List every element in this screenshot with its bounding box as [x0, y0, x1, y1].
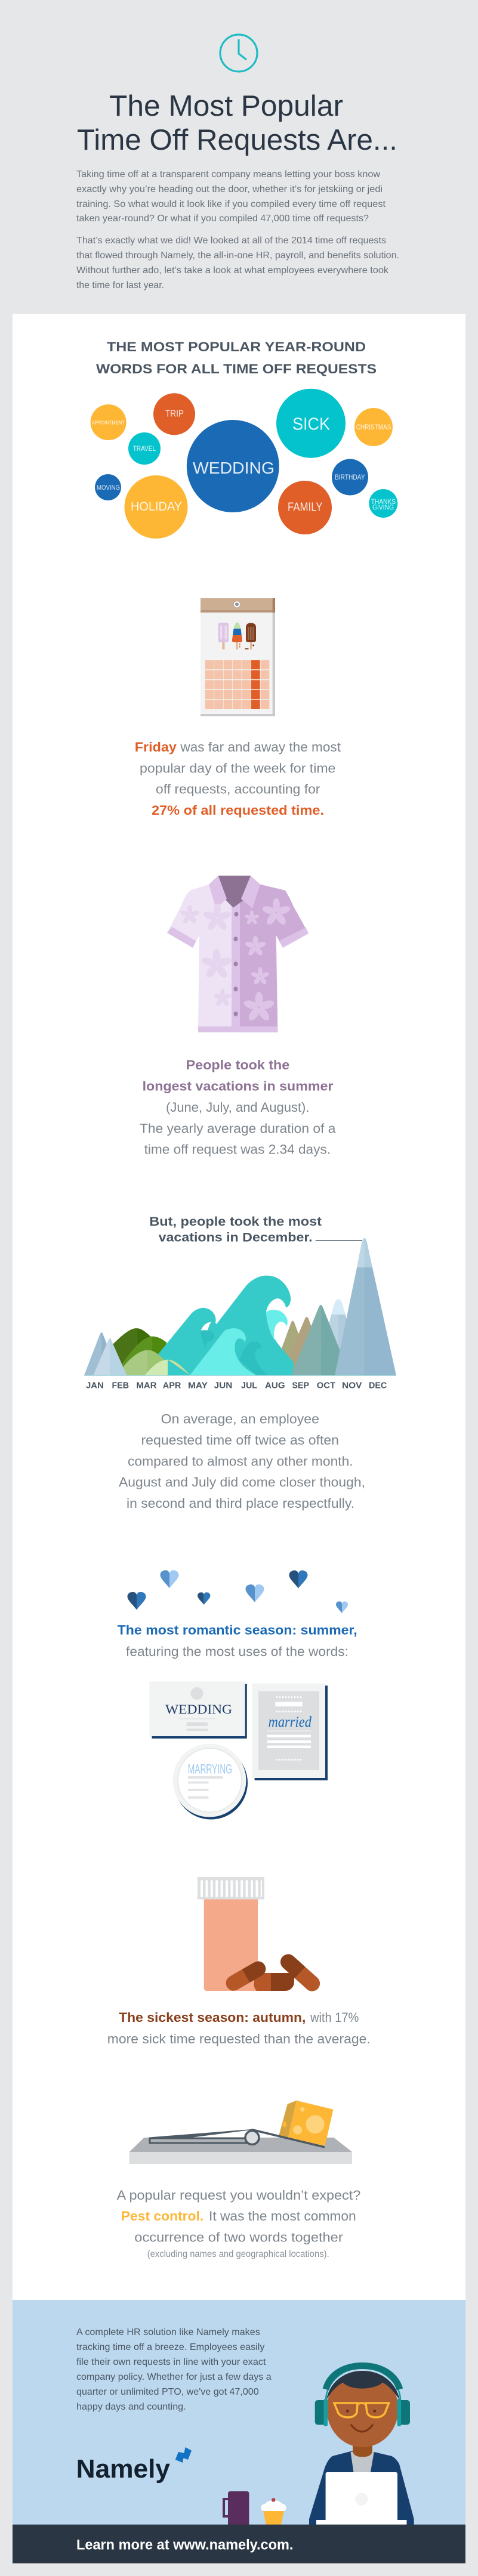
text: pest control: It was the most common: [209, 2209, 356, 2224]
text: Friday: 27% of all requested time.: [152, 803, 324, 818]
text: pest control: A popular request you wouldn’t expect?: [117, 2188, 360, 2203]
footer text: happy days and counting.: [76, 2402, 186, 2412]
chart: word bubbles: WEDDING: [193, 459, 275, 477]
text: longest vacations: (June, July, and August).: [166, 1100, 309, 1115]
footer text: quarter or unlimited PTO, we've got 47,000: [76, 2387, 259, 2397]
intro text: That’s exactly what we did! We looked at all of the 2014 time off requests: [76, 236, 386, 246]
text: pest control: occurrence of two words together: [134, 2230, 343, 2245]
heading: December: But, people took the most: [149, 1215, 322, 1229]
icon: cupcake: [261, 2498, 286, 2525]
heading: popular words: WORDS FOR ALL TIME OFF REQUESTS: [96, 361, 377, 376]
Namely logo: [76, 2447, 192, 2484]
panel: call to action bar: Learn more at www.namely.com.: [76, 2537, 293, 2553]
chart: word bubbles: SICK: [292, 415, 331, 434]
text: sickest season: with 17%: [310, 2010, 359, 2025]
text: Friday: was far and away the most: [180, 740, 341, 754]
blue mountains: january february: [84, 1332, 127, 1375]
text: on average: in second and third place respectfully.: [127, 1496, 354, 1511]
month labels: DEC: [369, 1381, 387, 1390]
chart: word bubbles: APPOINTMENT: [92, 420, 125, 426]
text: romantic season: The most romantic season: summer,: [118, 1623, 357, 1638]
calendar grid: [205, 660, 269, 709]
text: on average: requested time off twice as often: [141, 1433, 339, 1448]
month labels: APR: [163, 1381, 181, 1390]
shirt buttons: [234, 912, 239, 1016]
laptop: [316, 2472, 407, 2525]
month labels: MAR: [136, 1381, 157, 1390]
pill: horizontal: [254, 1973, 294, 1991]
month labels: FEB: [112, 1381, 129, 1390]
text: on average: On average, an employee: [161, 1412, 319, 1427]
text: romantic season: [118, 1623, 357, 1659]
title: The Most Popular: [109, 90, 343, 122]
icon: mouse trap with cheese: [129, 2101, 352, 2164]
month labels: SEP: [292, 1381, 309, 1390]
title: [77, 90, 397, 156]
chart: word bubbles: MOVING: [97, 484, 120, 491]
icon: hawaiian shirt: [167, 876, 309, 1032]
text: Friday: Friday: [135, 740, 177, 754]
card: marrying round card: [173, 1744, 248, 1819]
popsicle: chocolate: [245, 623, 256, 650]
mountain: december: [335, 1238, 396, 1375]
green hills: march: [113, 1328, 170, 1375]
chart: word bubbles: THANKS: [371, 499, 396, 506]
intro text: that flowed through Namely, the all-in-one HR, payroll, and benefits solution.: [76, 251, 399, 261]
text: Friday: [135, 740, 341, 818]
pill: right: [277, 1951, 323, 1994]
footer text: A complete HR solution like Namely makes: [76, 2327, 260, 2337]
pill: left: [223, 1959, 269, 1993]
card: wedding invitation: [149, 1682, 247, 1739]
text: Friday: popular day of the week for time: [140, 761, 335, 776]
trap wire: [149, 2129, 325, 2147]
month labels: NOV: [342, 1381, 362, 1390]
panel: call to action bar: [13, 2525, 465, 2563]
headphones: [315, 2399, 410, 2426]
icon: mug: [224, 2491, 249, 2525]
text: longest vacations: The yearly average duration of a: [140, 1121, 336, 1136]
shirt flowers right: [243, 898, 291, 1022]
card: wedding invitation: WEDDING: [165, 1702, 232, 1717]
card: married invitation: married: [269, 1714, 312, 1730]
text: pest control: Pest control.: [121, 2209, 203, 2224]
chart: word bubbles: HOLIDAY: [131, 500, 182, 514]
heading: popular words: [96, 339, 377, 376]
tan mountains: august september: [280, 1317, 325, 1375]
chart: word bubbles: BIRTHDAY: [335, 473, 365, 481]
chart: word bubbles: CHRISTMAS: [356, 424, 391, 431]
text: romantic season: featuring the most uses of the words:: [126, 1644, 349, 1659]
icon: calendar with popsicles: [201, 598, 275, 716]
month labels: [86, 1381, 387, 1390]
intro text: [76, 169, 399, 290]
illustration: person with headphones: [309, 2365, 414, 2525]
chart: monthly mountains: [84, 1238, 396, 1390]
chart: word bubbles: FAMILY: [288, 501, 322, 514]
text: sickest season: The sickest season: autumn,: [119, 2010, 306, 2025]
intro text: exactly why you’re heading out the door, whether it’s for jetskiing or jedi: [76, 184, 383, 194]
footer text: [76, 2327, 272, 2412]
intro text: Taking time off at a transparent company means letting your boss know: [76, 169, 380, 180]
card: married invitation: [252, 1683, 328, 1780]
text: on average: compared to almost any other month.: [128, 1454, 353, 1468]
text: sickest season: [107, 2010, 371, 2046]
month labels: OCT: [317, 1381, 335, 1390]
icon: pill bottle: [198, 1877, 323, 1994]
heading: December: vacations in December.: [159, 1230, 313, 1244]
text: longest vacations: longest vacations in summer: [143, 1078, 334, 1093]
heading: popular words: THE MOST POPULAR YEAR-ROUND: [107, 339, 366, 354]
text: pest control: (excluding names and geographical locations).: [147, 2249, 329, 2259]
cheese: [279, 2101, 333, 2146]
footer text: company policy. Whether for just a few days a: [76, 2372, 272, 2382]
text: longest vacations: [140, 1057, 336, 1157]
text: on average: [119, 1412, 365, 1511]
chart: word bubbles: TRAVEL: [133, 444, 156, 453]
heading: December: [149, 1215, 322, 1244]
footer text: file their own requests in line with your exact: [76, 2357, 266, 2367]
chart: word bubbles: TRIP: [165, 409, 184, 419]
icon: hearts: [128, 1570, 348, 1613]
text: on average: August and July did come closer though,: [119, 1475, 365, 1490]
intro text: taken year-round? Or what if you compiled 47,000 time off requests?: [76, 214, 369, 224]
wave: july: [201, 1276, 294, 1375]
month labels: MAY: [188, 1381, 208, 1390]
footer text: tracking time off a breeze. Employees easily: [76, 2342, 264, 2352]
popsicle: tricolour: [232, 623, 242, 650]
popsicle: purple: [218, 623, 229, 650]
card: marrying round card: MARRYING: [188, 1761, 232, 1776]
month labels: JUN: [214, 1381, 232, 1390]
Namely logo: Namely: [76, 2454, 171, 2484]
shirt flowers: [180, 904, 233, 1007]
intro text: Without further ado, let’s take a look at what employees everywhere took: [76, 265, 389, 276]
text: longest vacations: time off request was 2.34 days.: [144, 1142, 331, 1157]
mountain: november: [316, 1299, 358, 1375]
glasses: [334, 2403, 389, 2417]
text: longest vacations: People took the: [186, 1057, 289, 1072]
chart: word bubbles: [91, 389, 397, 539]
month labels: JUL: [241, 1381, 257, 1390]
mountain: october: [291, 1305, 345, 1375]
month labels: JAN: [86, 1381, 104, 1390]
wave: june: [190, 1328, 269, 1375]
title: Time Off Requests Are...: [77, 124, 397, 156]
wave: may: [156, 1308, 239, 1375]
chart: word bubbles: GIVING: [372, 505, 394, 512]
icon: clock: [220, 35, 257, 72]
month labels: AUG: [265, 1381, 285, 1390]
intro text: the time for last year.: [76, 280, 164, 290]
intro text: training. So what would it look like if you compiled every time off request: [76, 199, 386, 209]
text: pest control: [117, 2188, 360, 2259]
text: sickest season: more sick time requested than the average.: [107, 2031, 371, 2046]
panel: footer: [13, 2300, 465, 2525]
green hills: april: [122, 1350, 190, 1375]
text: Friday: off requests, accounting for: [156, 782, 320, 797]
